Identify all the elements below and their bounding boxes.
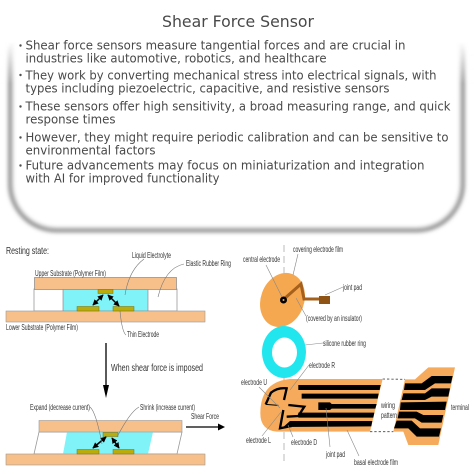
upper substrate	[39, 420, 182, 432]
electrode quadrants	[266, 388, 304, 428]
bullet 2: They work by converting mechanical stress into electrical signals, with	[25, 68, 437, 82]
central electrode dot	[280, 296, 287, 304]
bullet 2	[19, 68, 437, 96]
bullet 3: These sensors offer high sensitivity, a broad measuring range, and quick	[25, 100, 451, 114]
body traces	[283, 385, 381, 427]
labels: Shear Force	[191, 412, 219, 421]
labels	[6, 251, 231, 339]
labels: basal electrode film	[354, 458, 398, 467]
labels: electrode R	[309, 361, 335, 370]
diagram: sensor exploded view	[241, 245, 469, 467]
liquid electrolyte sheared	[63, 432, 153, 454]
bullet 2: types including piezoelectric, capacitive, and resistive sensors	[26, 82, 390, 96]
labels: (covered by an insulator)	[306, 314, 362, 323]
diagram: under shear force	[6, 403, 225, 465]
labels: joint pad	[325, 450, 345, 459]
covering electrode film disc	[253, 267, 312, 333]
text block: bullet list	[19, 38, 451, 186]
lower substrate	[6, 454, 205, 465]
film terminal end	[393, 367, 455, 445]
label: when shear force is imposed: When shear force is imposed	[111, 363, 203, 374]
leader lines	[120, 259, 184, 335]
basal electrode film	[260, 367, 455, 445]
arrow: shear force	[186, 424, 225, 430]
bullet 5	[19, 158, 425, 186]
upper substrate	[34, 278, 176, 290]
bullet 1: Shear force sensors measure tangential forces and are crucial in	[26, 38, 406, 52]
axis dashed line	[283, 245, 285, 463]
liquid electrolyte	[63, 289, 148, 311]
lower substrate	[6, 311, 205, 322]
brown trace and joint pad	[284, 284, 330, 304]
labels: covering electrode film	[293, 245, 343, 254]
labels: joint pad	[342, 283, 362, 292]
labels: Expand (decrease current)	[30, 403, 90, 412]
panel: summary card	[0, 0, 474, 230]
labels: Elastic Rubber Ring	[186, 259, 231, 268]
thin electrodes	[77, 432, 134, 454]
bullet 1	[19, 38, 406, 66]
labels: Upper Substrate (Polymer Film)	[35, 269, 106, 278]
labels: central electrode	[243, 255, 280, 264]
terminal traces	[394, 376, 453, 437]
labels: electrode D	[291, 438, 317, 447]
thin electrodes	[77, 290, 134, 311]
bullet 4: However, they might require periodic calibration and can be sensitive to	[26, 130, 448, 144]
bullet 3: response times	[26, 112, 116, 126]
leader lines	[259, 254, 359, 456]
labels: electrode U	[241, 378, 267, 387]
bullet 3	[19, 100, 451, 126]
diagram: resting state	[6, 246, 231, 339]
labels: silicone rubber ring	[323, 339, 366, 348]
silicone rubber ring	[262, 326, 306, 378]
bullet 5: with AI for improved functionality	[26, 172, 220, 186]
labels: Shrink (increase current)	[140, 403, 195, 412]
labels: Thin Electrode	[127, 330, 159, 339]
labels	[30, 403, 219, 421]
bullet 1: industries like automotive, robotics, and healthcare	[26, 52, 326, 66]
film body	[260, 379, 383, 432]
rubber ring sheared	[34, 432, 182, 454]
bullet 5: Future advancements may focus on miniaturization and integration	[26, 158, 424, 172]
arrow: transition down	[103, 343, 109, 398]
bullet 4: environmental factors	[26, 144, 156, 158]
title: Shear Force Sensor	[162, 12, 314, 31]
bullet 4	[19, 130, 449, 158]
labels	[241, 245, 469, 467]
rubber ring	[34, 289, 177, 311]
labels: Liquid Electrolyte	[132, 251, 171, 260]
heading: resting state: Resting state:	[6, 246, 49, 257]
leader lines	[90, 407, 139, 444]
labels: pattern	[381, 411, 397, 420]
labels: wiring	[380, 401, 395, 410]
wiring gap dashes	[370, 379, 405, 432]
current arrows	[93, 437, 119, 448]
labels: Lower Substrate (Polymer Film)	[6, 323, 78, 332]
labels: electrode L	[246, 436, 271, 445]
current arrows	[93, 295, 119, 306]
